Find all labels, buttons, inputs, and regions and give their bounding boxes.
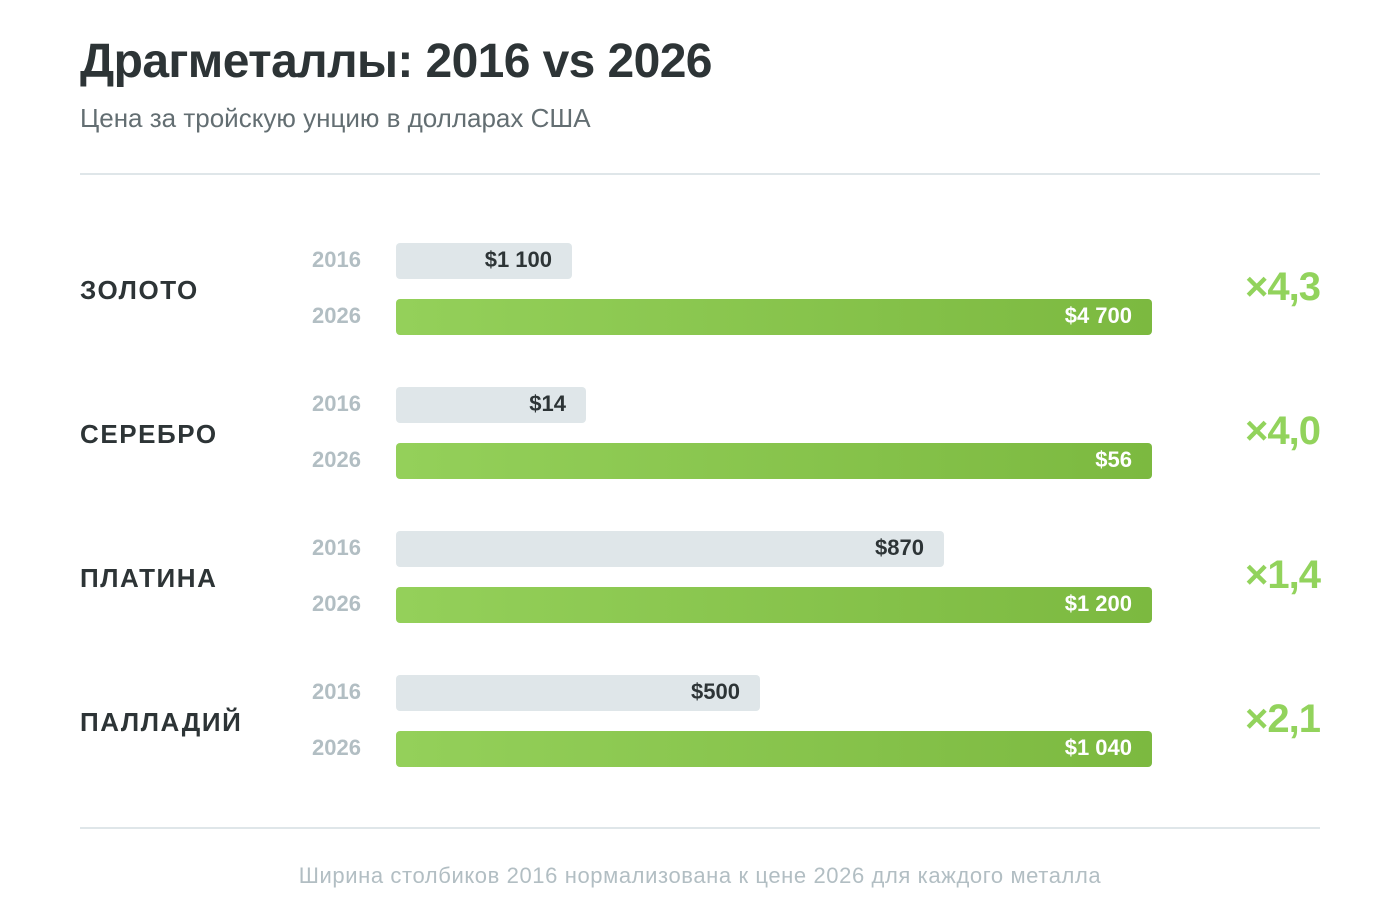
- footnote: Ширина столбиков 2016 нормализована к цене 2026 для каждого металла: [299, 863, 1101, 888]
- year label: palladium 2026: 2026: [312, 735, 361, 760]
- metal name: platinum: ПЛАТИНА: [80, 563, 217, 593]
- year label: silver 2026: 2026: [312, 447, 361, 472]
- bar: platinum 2026: [396, 587, 1152, 623]
- bar: palladium 2026: [396, 731, 1152, 767]
- bar: silver 2016: $14: [529, 391, 566, 416]
- subtitle: Цена за тройскую унцию в долларах США: [80, 103, 591, 133]
- year label: gold 2016: 2016: [312, 247, 361, 272]
- panel: silver row: [80, 387, 1320, 479]
- multiplier: platinum: ×1,4: [1245, 553, 1320, 597]
- bar: gold 2016: [396, 243, 572, 279]
- title: Драгметаллы: 2016 vs 2026: [80, 35, 712, 88]
- metal name: gold: ЗОЛОТО: [80, 275, 199, 305]
- year label: palladium 2016: 2016: [312, 679, 361, 704]
- bar: silver 2026: $56: [1095, 447, 1132, 472]
- bar: gold 2016: $1 100: [485, 247, 552, 272]
- bar: gold 2026: [396, 299, 1152, 335]
- bar: platinum 2016: [396, 531, 944, 567]
- bar: platinum 2026: $1 200: [1065, 591, 1132, 616]
- bar: palladium 2026: $1 040: [1065, 735, 1132, 760]
- panel: palladium row: [80, 675, 1320, 767]
- bar: palladium 2016: $500: [691, 679, 740, 704]
- year label: platinum 2016: 2016: [312, 535, 361, 560]
- year label: gold 2026: 2026: [312, 303, 361, 328]
- metal name: palladium: ПАЛЛАДИЙ: [80, 707, 242, 737]
- bar: platinum 2016: $870: [875, 535, 924, 560]
- multiplier: gold: ×4,3: [1245, 265, 1320, 309]
- panel: gold row: [80, 243, 1320, 335]
- year label: platinum 2026: 2026: [312, 591, 361, 616]
- multiplier: palladium: ×2,1: [1245, 697, 1320, 741]
- bar: palladium 2016: [396, 675, 760, 711]
- year label: silver 2016: 2016: [312, 391, 361, 416]
- bar: gold 2026: $4 700: [1065, 303, 1132, 328]
- panel: platinum row: [80, 531, 1321, 623]
- metal name: silver: СЕРЕБРО: [80, 419, 218, 449]
- bar: silver 2026: [396, 443, 1152, 479]
- multiplier: silver: ×4,0: [1245, 409, 1320, 453]
- bar: silver 2016: [396, 387, 586, 423]
